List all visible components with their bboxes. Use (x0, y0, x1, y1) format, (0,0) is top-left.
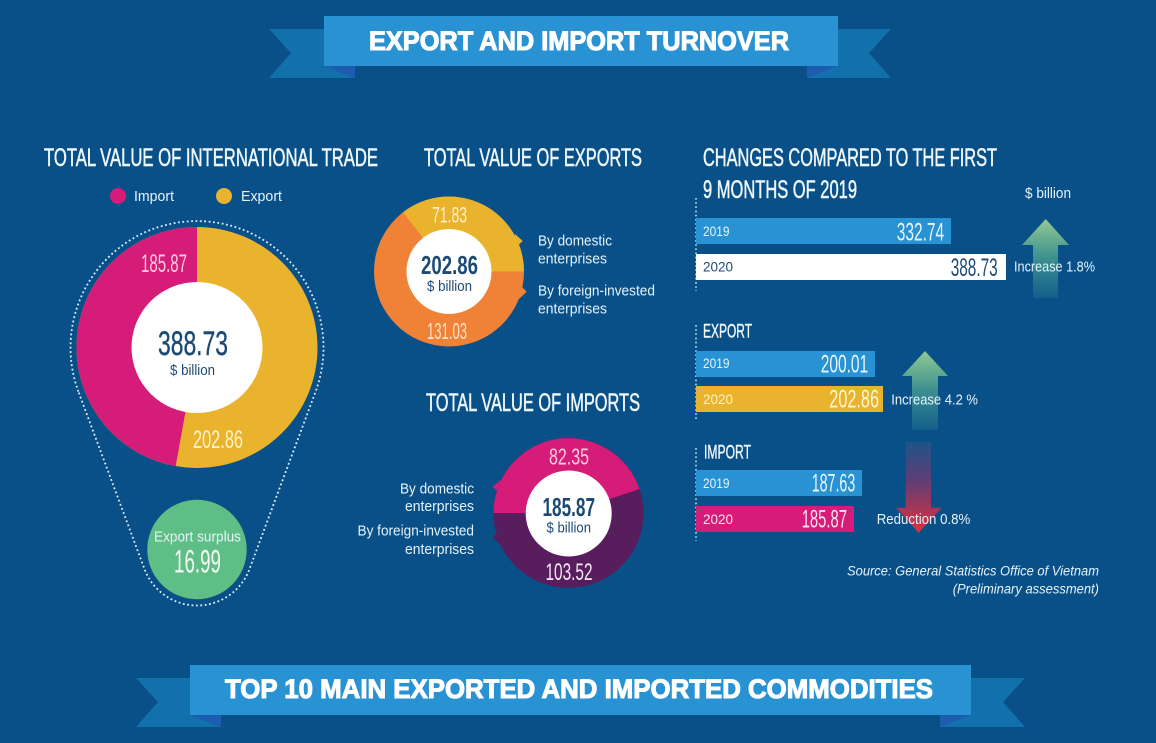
donut chart: imports: 185.87 (542, 492, 595, 522)
label: reduction 0.8%: Reduction 0.8% (877, 512, 970, 528)
dotted outline linking the donut to export surplus (71, 221, 324, 606)
banner: export and import turnover (269, 16, 891, 78)
donut chart: international trade: 202.86 (193, 426, 243, 454)
labels: import donut (358, 481, 474, 558)
heading: changes compared to the first 9 months of 2019 (703, 144, 997, 204)
heading: changes compared to the first 9 months of 2019: 9 MONTHS OF 2019 (703, 176, 857, 204)
bar chart: total turnover: 2020 (703, 260, 733, 275)
bar chart: total turnover: 332.74 (897, 219, 944, 247)
bar chart: import (696, 443, 862, 541)
banner: top 10 main exported and imported commodities (136, 665, 1025, 727)
donut chart: exports: 202.86 (421, 250, 478, 280)
donut chart: imports: 103.52 (546, 559, 592, 586)
bar chart: export: 2019 (703, 356, 730, 371)
labels: import donut: enterprises (405, 542, 474, 558)
bar chart: export: 200.01 (821, 350, 868, 378)
labels: export donut: enterprises (538, 301, 607, 317)
callout: export surplus (147, 500, 247, 599)
bar chart: import: IMPORT (704, 443, 751, 464)
heading: changes compared to the first 9 months of 2019: CHANGES COMPARED TO THE FIRST (703, 144, 997, 172)
donut chart: exports (374, 196, 527, 346)
donut chart: exports: 131.03 (427, 318, 467, 344)
bar chart: total turnover (696, 198, 1006, 291)
callout: export surplus: 16.99 (174, 544, 221, 580)
bar chart: total turnover: 388.73 (951, 254, 998, 282)
heading: total value of exports: TOTAL VALUE OF EXPORTS (424, 144, 642, 172)
bar chart: export (696, 322, 883, 419)
labels: import donut: By foreign-invested (358, 524, 474, 540)
donut chart: imports: $ billion (546, 521, 591, 537)
bar chart: import: 185.87 (802, 506, 847, 534)
donut chart: imports (492, 438, 644, 588)
source note (847, 564, 1099, 596)
source note: Source: General Statistics Office of Vietnam (847, 564, 1099, 579)
arrow: import reduction (896, 442, 942, 533)
bar chart: export: EXPORT (703, 322, 752, 343)
unit label: $ billion (1025, 186, 1071, 202)
bar chart: total turnover: 2019 (703, 224, 730, 239)
banner: export and import turnover: EXPORT AND IMPORT TURNOVER (369, 26, 789, 56)
legend: import and export: Import (134, 189, 174, 205)
bar chart: export: 2020 (703, 392, 733, 407)
bar chart: import: 187.63 (812, 470, 855, 498)
donut chart: imports: 82.35 (549, 444, 589, 470)
labels: export donut (538, 234, 655, 317)
arrow: export increase (902, 351, 948, 430)
labels: import donut: By domestic (400, 481, 474, 497)
donut chart: international trade: $ billion (170, 363, 215, 379)
banner: top 10 main exported and imported commodities: TOP 10 MAIN EXPORTED AND IMPORTED COMMODITIES (225, 674, 933, 704)
source note: (Preliminary assessment) (953, 581, 1099, 596)
arrow: total increase (1022, 219, 1069, 298)
bar chart: export: 202.86 (829, 386, 879, 414)
legend: import and export: Export (241, 189, 282, 205)
legend: import and export (110, 188, 282, 205)
donut chart: international trade (76, 227, 318, 468)
label: increase 1.8%: Increase 1.8% (1014, 260, 1095, 276)
labels: export donut: By foreign-invested (538, 284, 655, 300)
donut chart: international trade: 185.87 (141, 250, 187, 278)
heading: total value of international trade: TOTAL VALUE OF INTERNATIONAL TRADE (44, 144, 378, 172)
bar chart: import: 2019 (703, 476, 730, 491)
labels: import donut: enterprises (405, 499, 474, 515)
bar chart: import: 2020 (703, 512, 733, 527)
donut chart: exports: $ billion (427, 279, 472, 295)
callout: export surplus: Export surplus (154, 530, 241, 546)
label: increase 4.2%: Increase 4.2 % (891, 393, 978, 409)
labels: export donut: enterprises (538, 251, 607, 267)
donut chart: international trade: 388.73 (158, 325, 228, 363)
labels: export donut: By domestic (538, 234, 612, 250)
donut chart: exports: 71.83 (432, 202, 467, 228)
heading: total value of imports: TOTAL VALUE OF IMPORTS (426, 389, 640, 417)
